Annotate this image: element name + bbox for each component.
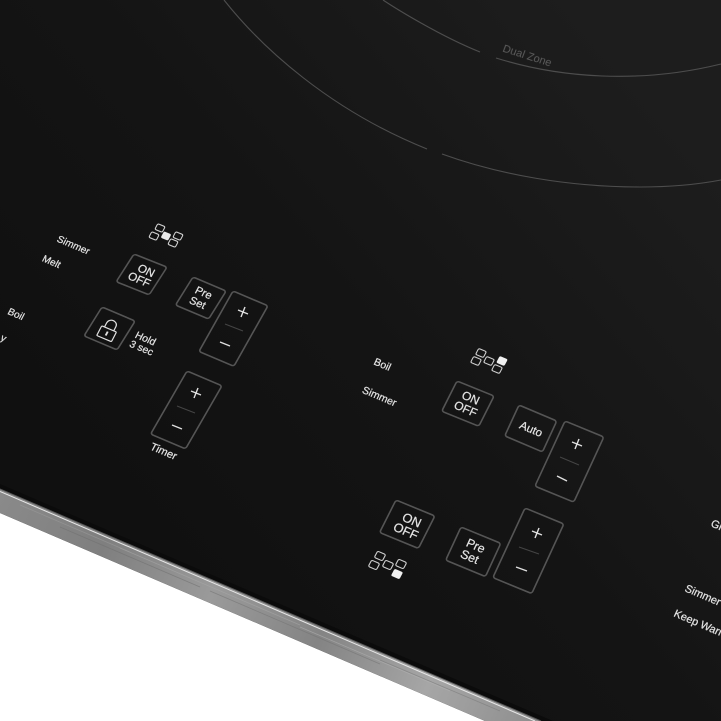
label: Hold 3 sec: Hold	[133, 330, 158, 348]
ON/OFF button: OFF	[126, 271, 152, 290]
edge highlight	[0, 492, 535, 721]
label: Simmer: Simmer	[360, 385, 398, 409]
left control group	[0, 224, 268, 463]
ON/OFF button: ON	[135, 263, 157, 280]
zone selector icon	[149, 224, 183, 247]
dark glass bevel	[0, 484, 553, 721]
burner zone outlines	[224, 0, 721, 187]
Auto button: Auto	[517, 420, 544, 440]
label: Boil: Boil	[5, 307, 26, 323]
zone selector icon	[368, 551, 407, 579]
Pre Set button: Set	[458, 547, 482, 567]
ON/OFF button: ON	[400, 509, 424, 530]
Auto button	[505, 405, 557, 452]
Pre Set button	[176, 277, 226, 319]
Pre Set button: Pre	[193, 285, 214, 302]
stainless steel trim	[0, 489, 541, 721]
label: Boil: Boil	[372, 357, 392, 374]
brushed steel streaks	[20, 505, 500, 711]
Pre Set button: Set	[187, 295, 208, 312]
ON/OFF button	[442, 381, 494, 426]
Pre Set button: Pre	[464, 536, 488, 556]
label: Melt: Melt	[40, 254, 63, 271]
ON/OFF button: OFF	[452, 398, 480, 420]
label: Hold 3 sec	[127, 330, 158, 358]
label: Timer: Timer	[148, 441, 179, 463]
label: Simmer: Simmer	[55, 234, 92, 258]
center control group	[360, 348, 604, 594]
icon: padlock	[97, 318, 121, 342]
cooktop front edge	[0, 484, 553, 721]
plus/minus slider	[535, 421, 604, 502]
timer plus/minus slider	[151, 371, 222, 449]
ON/OFF button: ON	[459, 388, 482, 408]
upper trim line	[0, 489, 541, 721]
Pre Set button	[446, 527, 501, 577]
ON/OFF button: OFF	[391, 519, 421, 543]
zone label: Dual Zone: Dual Zone	[501, 43, 553, 69]
lock button	[84, 307, 135, 350]
ON/OFF button	[116, 254, 167, 295]
label: Hold 3 sec: 3 sec	[127, 339, 155, 358]
ON/OFF button	[380, 500, 435, 548]
right edge labels	[672, 518, 721, 641]
plus/minus slider	[199, 291, 268, 366]
zone selector icon	[471, 348, 508, 374]
white counter area	[0, 513, 485, 721]
plus/minus slider	[493, 508, 564, 594]
